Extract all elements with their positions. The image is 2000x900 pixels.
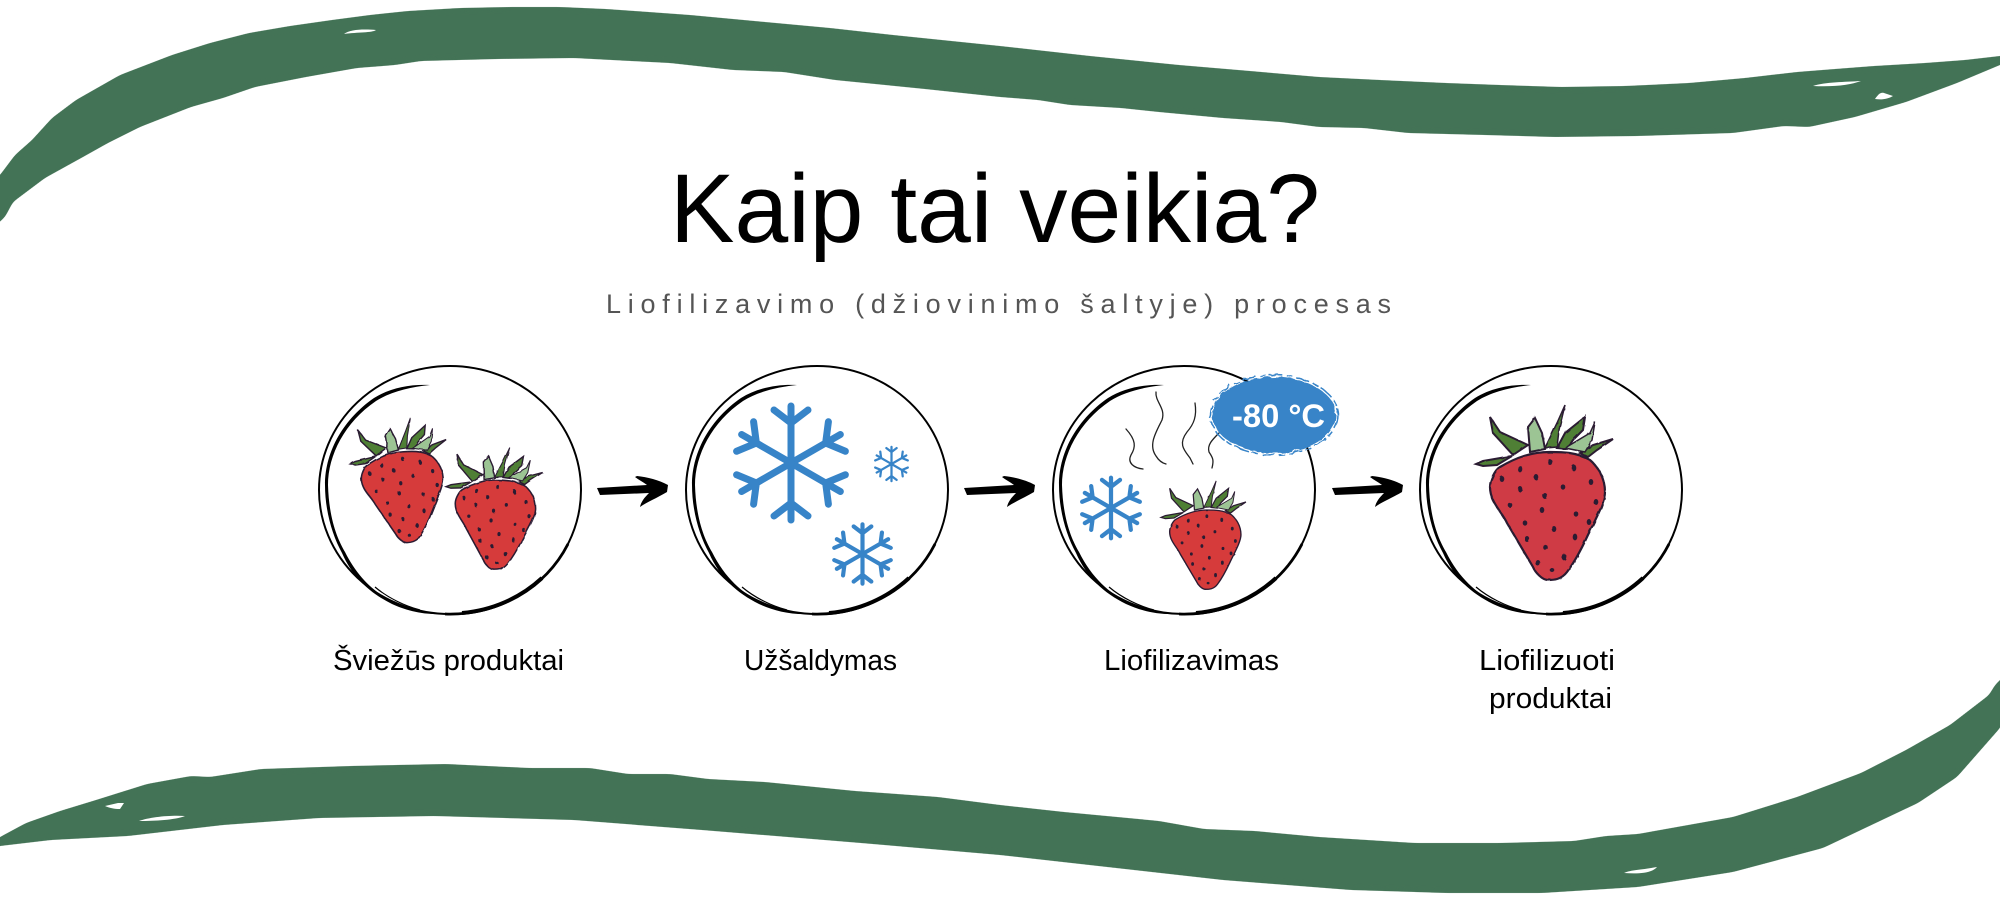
icon: vapour lines (1126, 392, 1219, 469)
label: step 4: Liofilizuoti (1479, 645, 1615, 677)
label: step 1: Šviežūs produktai (333, 645, 564, 677)
icon: large snowflake (733, 406, 849, 520)
arrow 1 (597, 476, 668, 507)
step 1: fresh produce (319, 366, 581, 614)
label: step 2: Užšaldymas (744, 645, 897, 677)
step 3: freeze-drying (1053, 366, 1315, 614)
circle outline 1 (319, 366, 581, 614)
icon: strawberry (1161, 481, 1246, 589)
circle outline 2 (686, 366, 948, 614)
step 2: freezing (686, 366, 948, 614)
arrow 2 (964, 476, 1035, 507)
arrow 3 (1332, 476, 1403, 507)
step 4: freeze-dried produce (1420, 366, 1682, 614)
temperature badge (1210, 375, 1338, 455)
icon: large strawberry (1476, 405, 1613, 580)
label: step 4 (1479, 645, 1615, 715)
icon: small snowflake (874, 447, 909, 481)
title: Kaip tai veikia? (670, 154, 1320, 263)
label: step 3: Liofilizavimas (1104, 645, 1279, 677)
temperature badge: -80 °C (1232, 398, 1325, 434)
bottom green brush stroke (0, 660, 2000, 893)
circle outline 3 (1053, 366, 1315, 614)
icon: snowflake (1080, 478, 1142, 538)
label: step 4: produktai (1489, 683, 1612, 715)
subtitle: Liofilizavimo (džiovinimo šaltyje) procesas (606, 289, 1391, 319)
top green brush stroke (0, 7, 2000, 240)
icon: two strawberries (347, 415, 543, 571)
circle outline 4 (1420, 366, 1682, 614)
icon: medium snowflake (832, 524, 893, 584)
